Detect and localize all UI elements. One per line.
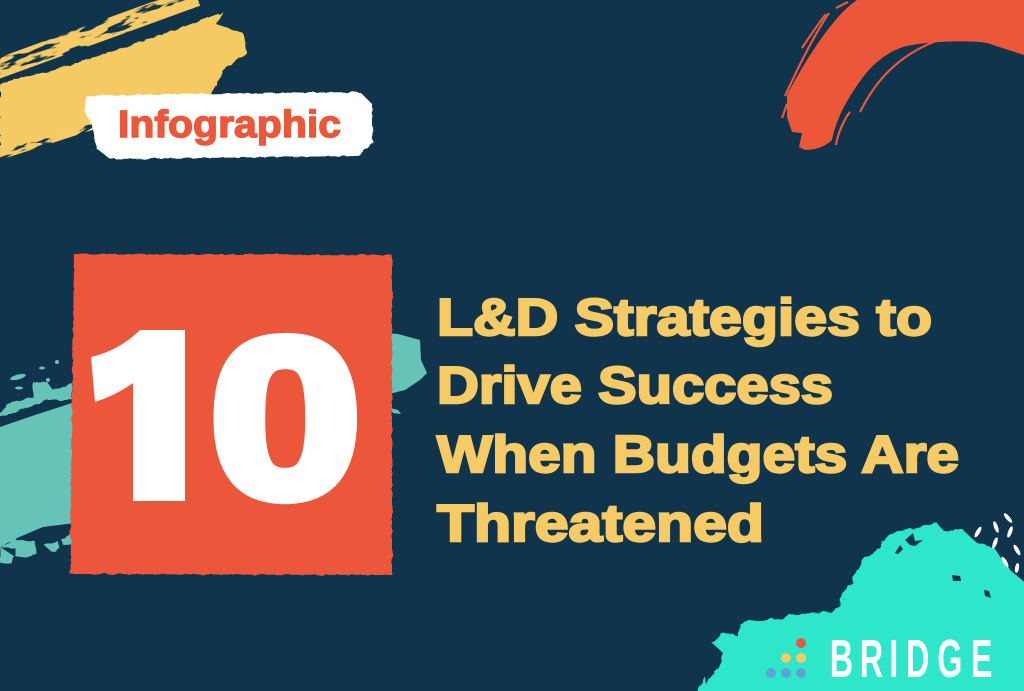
title: [437, 289, 959, 553]
title: When Budgets Are: [437, 426, 959, 484]
number 10: 0: [210, 292, 361, 544]
yellow brush stroke: [0, 0, 247, 160]
logo dots: [766, 638, 806, 678]
title: Threatened: [437, 495, 764, 553]
mint brush blob: [694, 523, 1024, 691]
Infographic label: [85, 92, 373, 159]
logo wordmark: BRIDGE: [830, 630, 992, 689]
number 10: 1: [80, 288, 226, 551]
number 10: [91, 330, 358, 504]
title: Drive Success: [437, 357, 833, 415]
title: L&D Strategies to: [437, 289, 932, 347]
white speckles: [973, 512, 1022, 573]
Bridge logo: [766, 630, 992, 689]
orange arc brush stroke: [782, 0, 1024, 150]
Infographic label: Infographic: [118, 104, 341, 146]
teal brush stroke: [0, 333, 427, 564]
number square: [70, 254, 392, 575]
